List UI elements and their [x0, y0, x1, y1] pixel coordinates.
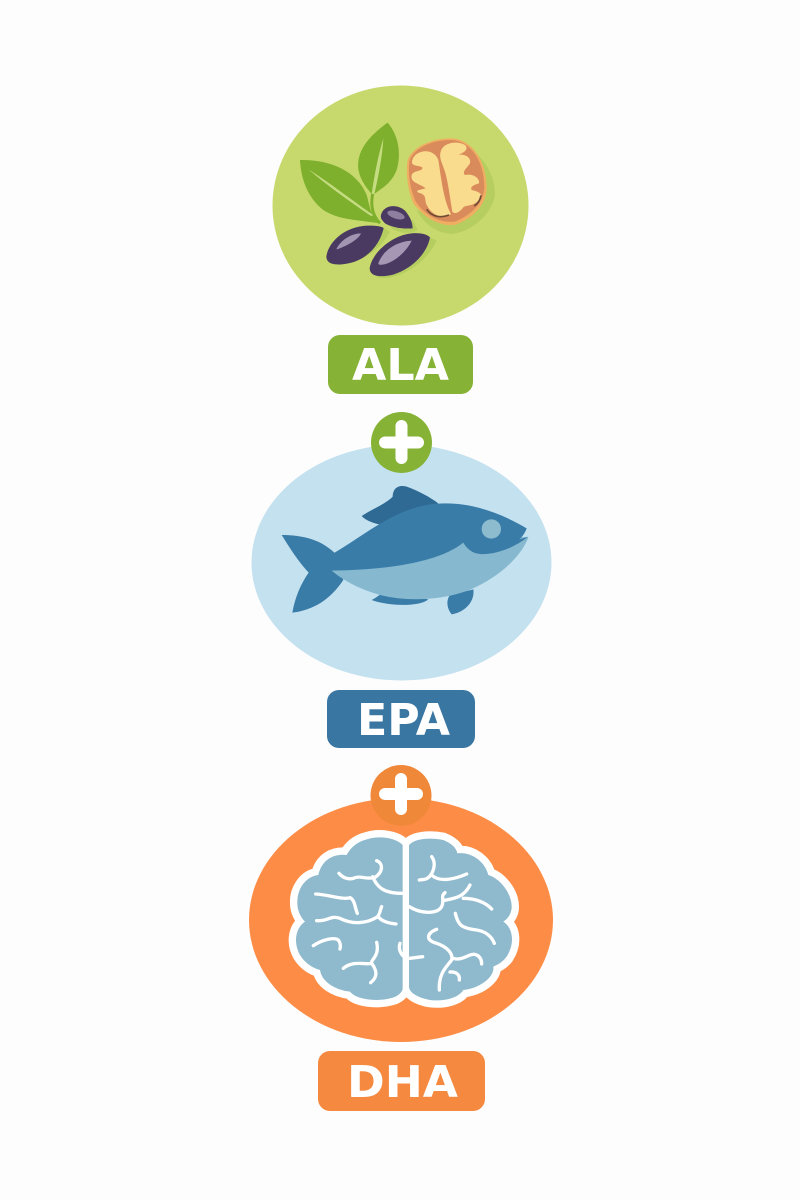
icon: green plus	[371, 412, 432, 473]
brain left hemisphere	[296, 837, 403, 1000]
fish pectoral fin	[447, 589, 474, 614]
icon: olive right	[370, 233, 430, 276]
label: EPA: EPA	[357, 695, 450, 746]
fish tail	[282, 535, 343, 613]
brain white outline	[296, 837, 512, 1000]
orange ellipse background	[249, 798, 553, 1042]
icon: brain	[296, 837, 512, 1000]
label: ALA	[328, 335, 473, 394]
leaf veins	[308, 138, 383, 216]
icon shadows	[332, 148, 495, 278]
fish belly	[332, 533, 528, 599]
icon: olive left	[326, 226, 384, 264]
green circle background	[272, 86, 528, 326]
brain right hemisphere	[409, 839, 512, 1000]
label: DHA: DHA	[347, 1057, 458, 1108]
icon: leaf small	[358, 123, 399, 195]
icon: leaf stem	[372, 192, 380, 223]
panel: ALA plant sources	[272, 86, 528, 326]
icon: olive top	[381, 206, 413, 229]
icon: fish	[282, 486, 528, 614]
icon: leaf large	[300, 160, 380, 223]
walnut kernel left	[411, 151, 451, 217]
walnut dark crease	[427, 195, 481, 217]
label: DHA	[318, 1051, 485, 1111]
icon: leaves, olives and walnut	[300, 123, 495, 278]
panel: EPA fish source	[252, 444, 552, 680]
walnut inner	[409, 140, 484, 222]
blue ellipse background	[252, 444, 552, 680]
fish eye	[482, 519, 501, 539]
walnut kernel right	[440, 143, 481, 213]
fish body	[330, 503, 528, 571]
icon: orange plus	[370, 765, 432, 826]
brain folds	[313, 857, 494, 990]
icon: walnut	[407, 138, 487, 225]
panel: DHA brain	[249, 798, 553, 1042]
label: ALA: ALA	[352, 340, 449, 391]
label: EPA	[327, 690, 475, 748]
fish dorsal fin	[362, 486, 438, 526]
walnut shell	[407, 138, 487, 225]
fish pelvic fin	[372, 590, 428, 605]
